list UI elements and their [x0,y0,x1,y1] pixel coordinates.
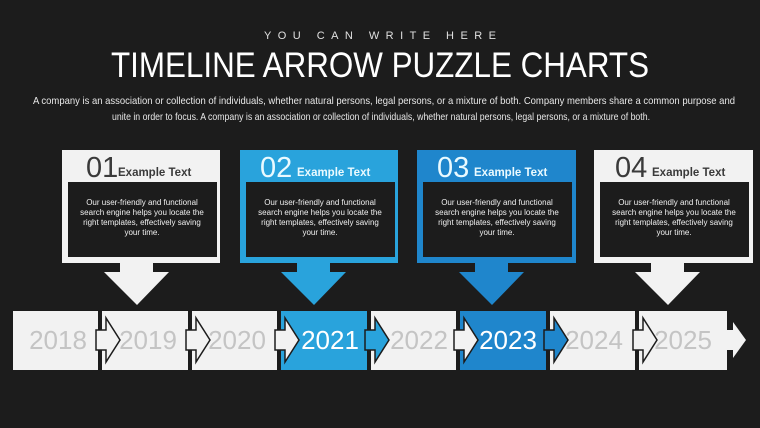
panel: 04: 04 [615,152,647,184]
timeline: 2018 [29,325,87,355]
panel: 03: 03 [437,152,469,184]
timeline [13,311,746,370]
panel: 04: Our user-friendly and functional [618,198,730,207]
panel: 02: your time. [302,228,338,237]
panel: 02: 02 [260,152,292,184]
panel: 01: right templates, effectively saving [83,218,201,227]
panel: 03: search engine helps you locate the [435,208,559,217]
panel: 04: your time. [656,228,692,237]
panel: 01: 01 [86,152,118,184]
panel: 03: Example Text [474,167,547,179]
panel: 01 [62,150,220,305]
timeline: 2020 [208,325,266,355]
panel: 04: Example Text [652,167,725,179]
panel: 04: search engine helps you locate the [612,208,736,217]
panel: 03 [417,150,576,305]
panel: 02: search engine helps you locate the [258,208,382,217]
title: TIMELINE ARROW PUZZLE CHARTS [111,46,649,85]
panel: 04: right templates, effectively saving [615,218,733,227]
panel: 03: your time. [479,228,515,237]
subtitle: YOU CAN WRITE HERE [264,30,496,42]
timeline: 2019 [119,325,177,355]
timeline: 2024 [565,325,623,355]
panel: 01: your time. [124,228,160,237]
description [33,95,735,123]
timeline: 2021 [301,325,359,355]
panel: 01: search engine helps you locate the [80,208,204,217]
panel: 02: Our user-friendly and functional [264,198,376,207]
panel: 01: Example Text [118,167,191,179]
panel: 03: right templates, effectively saving [438,218,556,227]
timeline: 2022 [390,325,448,355]
panel: 03: Our user-friendly and functional [441,198,553,207]
timeline: 2025 [654,325,712,355]
description: unite in order to focus. A company is an association or collection of individuals, whether natural persons, legal persons, or a mixture of both. [112,111,650,123]
panel: 02: Example Text [297,167,370,179]
timeline: 2023 [479,325,537,355]
panel: 02: right templates, effectively saving [261,218,379,227]
panel: 04 [594,150,753,305]
panel: 02 [240,150,398,305]
panel: 01: Our user-friendly and functional [86,198,198,207]
